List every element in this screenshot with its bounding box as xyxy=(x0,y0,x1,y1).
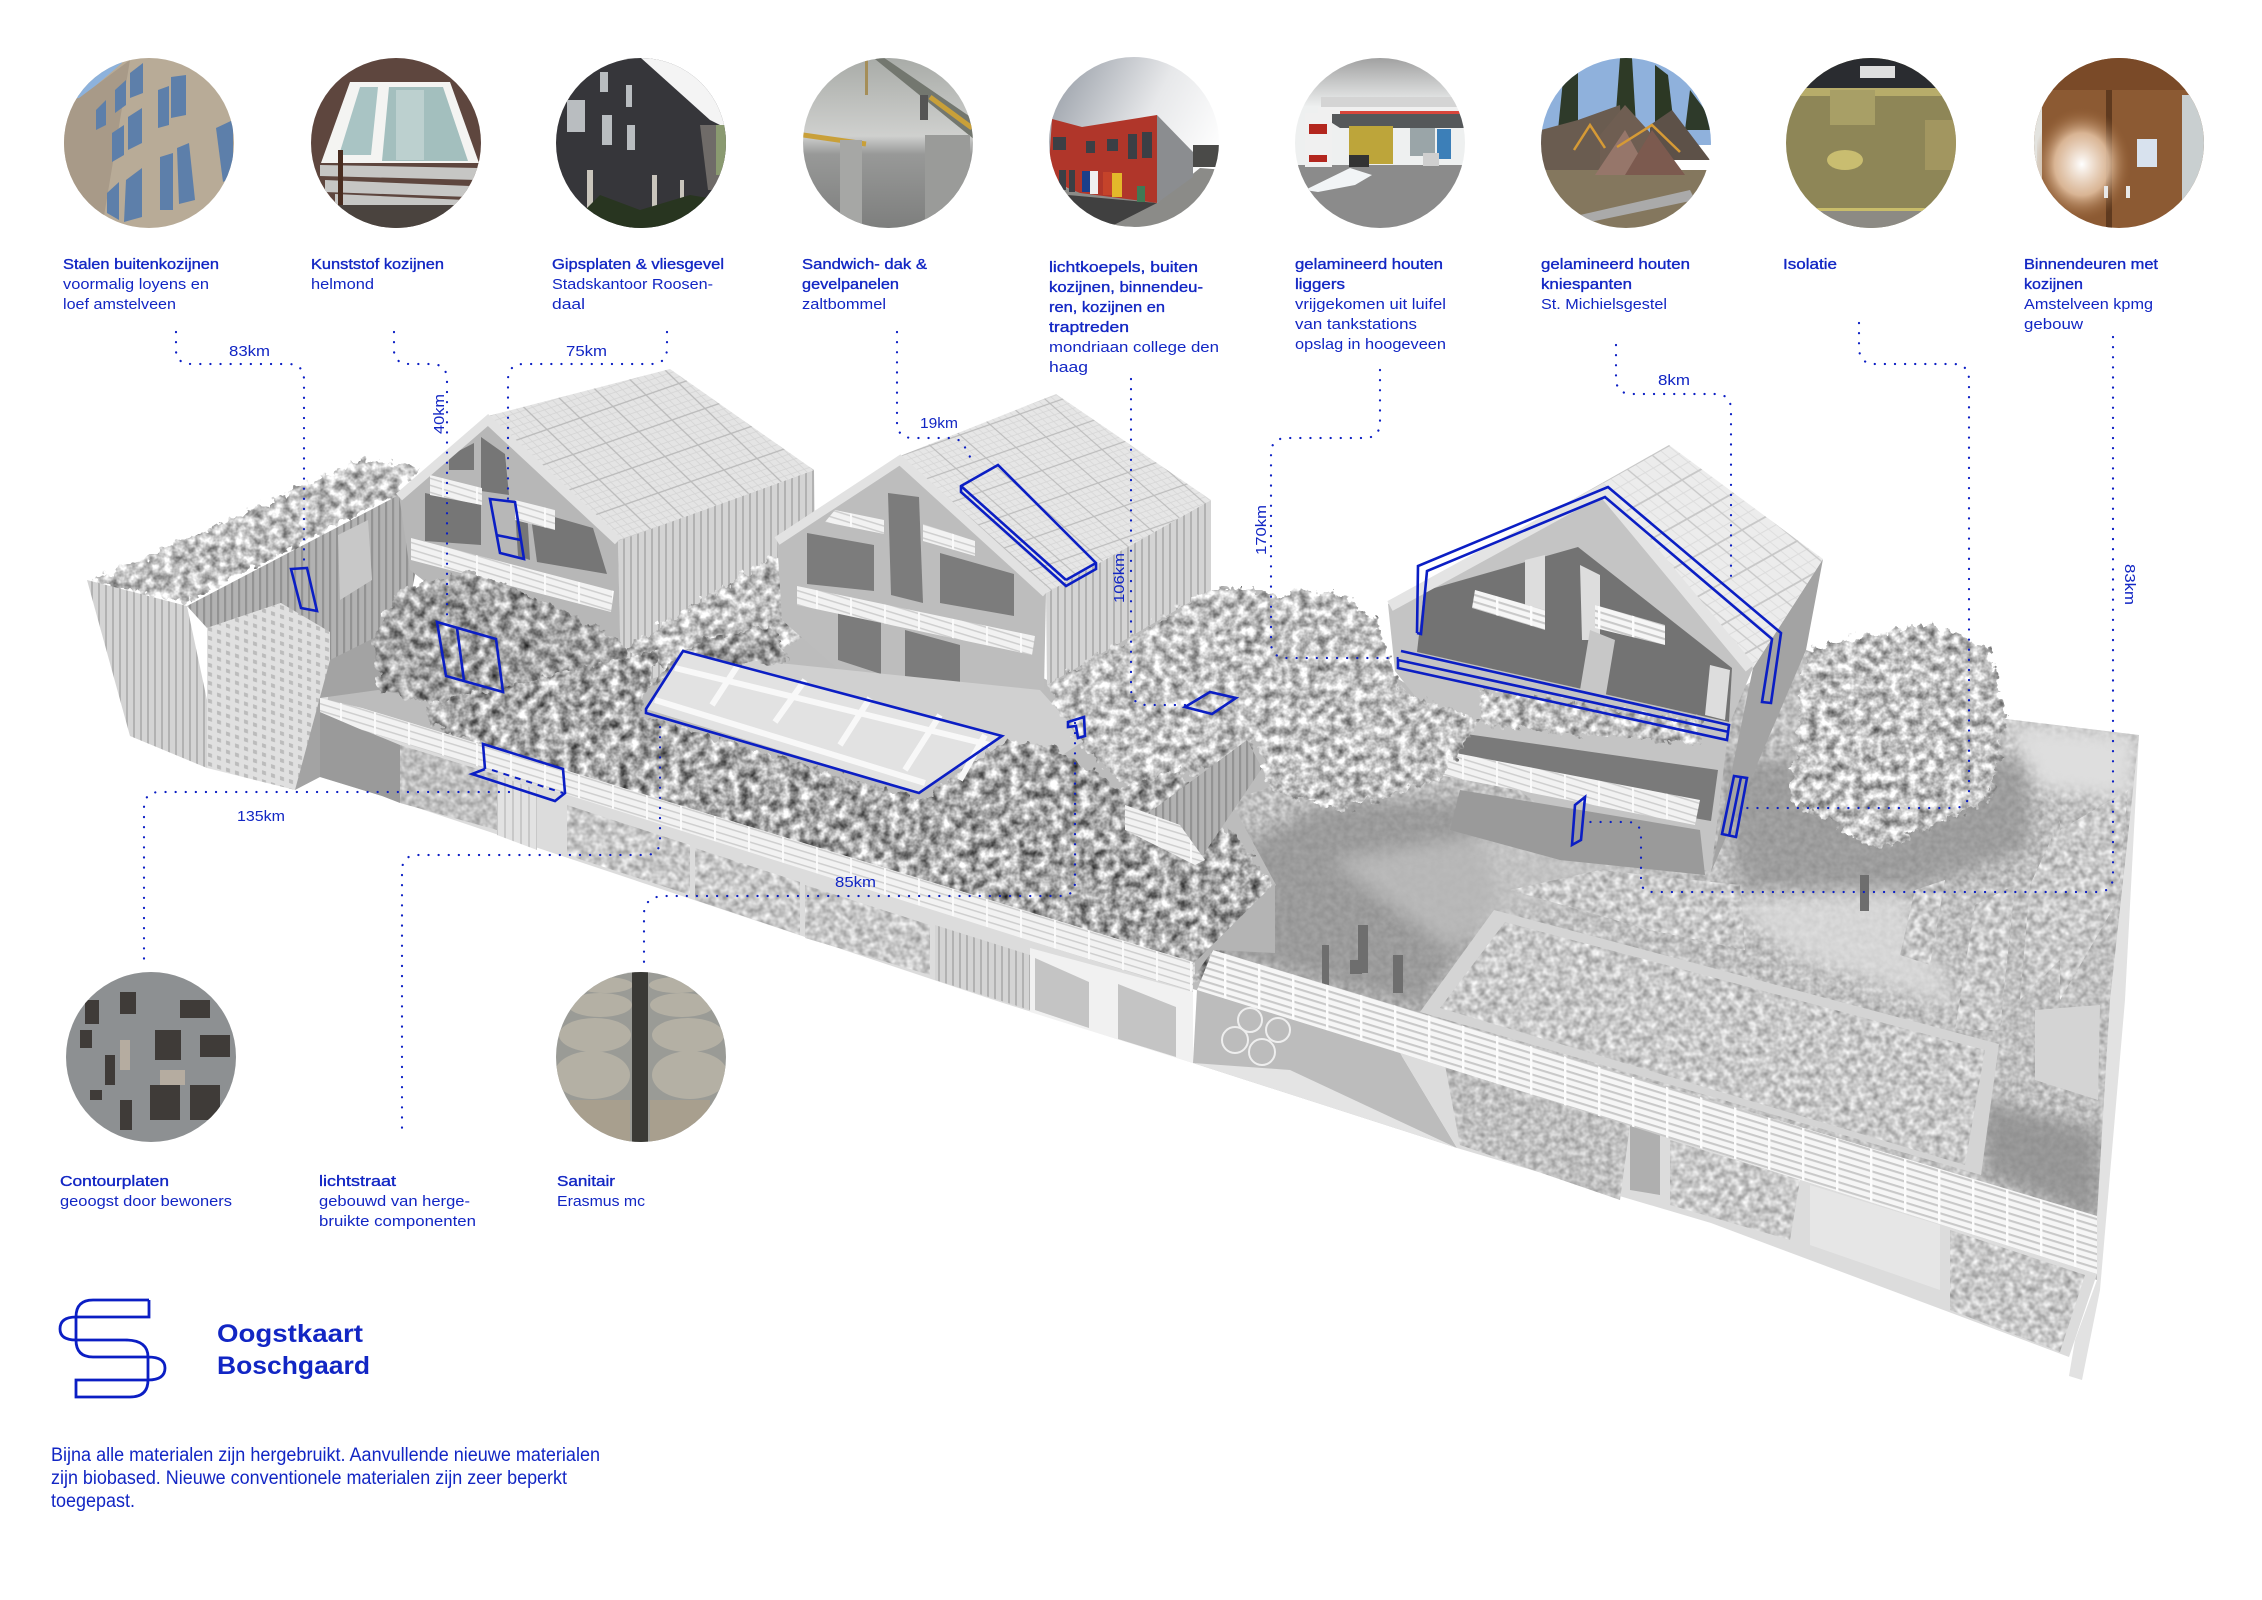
house 3 roof xyxy=(1602,445,1823,668)
highlight: steel frame xyxy=(291,568,317,611)
caption: Stalen buitenkozijnen: voormalig loyens en xyxy=(63,276,209,293)
title: Boschgaard xyxy=(217,1352,370,1380)
house 2 windows xyxy=(807,493,1014,690)
photo: insulation xyxy=(1786,58,1956,228)
door 1 xyxy=(1035,958,1089,1028)
house 1 gable xyxy=(399,416,621,680)
caption: lichtkoepels: kozijnen, binnendeu- xyxy=(1049,279,1203,296)
house 3 gable xyxy=(1388,483,1753,872)
connector: Kunststof kozijnen xyxy=(394,332,447,622)
caption: lichtkoepels xyxy=(1049,259,1219,376)
raised planter planting xyxy=(1440,922,1985,1165)
bicycle parking right xyxy=(2035,1005,2100,1100)
house 3 balconies xyxy=(1472,590,1665,645)
house 1 xyxy=(399,369,816,690)
caption: Binnendeuren: Binnendeuren met xyxy=(2024,256,2159,273)
title xyxy=(217,1320,370,1380)
distance 83km right: 83km xyxy=(2121,564,2138,605)
photo: plastic window frame xyxy=(311,58,481,228)
photo: steel window frames on brick facade xyxy=(64,58,234,228)
connector: Sanitair xyxy=(644,723,1075,968)
left block lower volume xyxy=(295,620,435,790)
highlight: glulam knee frame xyxy=(1417,487,1781,703)
front facade right xyxy=(1400,1053,2097,1357)
house 2 gable xyxy=(777,456,1046,690)
garden ground xyxy=(1196,650,2139,1216)
caption: gelamineerd houten kniespanten xyxy=(1541,256,1690,313)
house 3 barge board xyxy=(1390,490,1750,668)
caption: Sandwich panelen: Sandwich- dak & xyxy=(802,256,927,273)
caption: gelamineerd houten kniespanten: gelamineerd houten xyxy=(1541,256,1690,273)
caption: gelamineerd houten liggers xyxy=(1295,256,1446,353)
facade windows and trees left xyxy=(320,712,1030,1010)
caption: lichtkoepels: haag xyxy=(1049,359,1088,376)
connector: lichtkoepels xyxy=(1131,379,1185,705)
caption: gelamineerd houten liggers: liggers xyxy=(1295,276,1345,293)
central roof planting xyxy=(425,650,1275,985)
distance 40km: 40km xyxy=(431,394,448,434)
house 3 side wall xyxy=(1711,559,1823,872)
bicycle passage pavement xyxy=(1193,1063,1457,1148)
caption: Binnendeuren: gebouw xyxy=(2024,316,2083,333)
caption: Gipsplaten en vliesgevel: daal xyxy=(552,296,585,313)
planting between houses 1 and 2 xyxy=(621,530,816,690)
highlight: interior door xyxy=(1572,797,1585,845)
lichtstraat glass roof xyxy=(646,651,1002,793)
caption: gelamineerd houten kniespanten: St. Michielsgestel xyxy=(1541,296,1667,313)
highlight: glulam beams xyxy=(1398,651,1729,740)
distance 135km: 135km xyxy=(237,808,285,825)
distance 19km: 19km xyxy=(920,415,958,432)
distance 106km: 106km xyxy=(1111,553,1128,603)
caption: lichtkoepels: traptreden xyxy=(1049,319,1129,336)
caption: gelamineerd houten liggers: vrijgekomen uit luifel xyxy=(1295,296,1446,313)
axonometric view of Boschgaard xyxy=(87,369,2139,1380)
caption: Binnendeuren xyxy=(2024,256,2159,333)
distance 170km: 170km xyxy=(1253,505,1270,555)
bicycle passage xyxy=(1193,990,1457,1148)
caption: Sanitair xyxy=(557,1173,646,1210)
caption: Sanitair: Erasmus mc xyxy=(557,1193,646,1210)
pergola left xyxy=(320,698,1193,992)
highlight: insulation xyxy=(1722,776,1747,837)
distance 83km: 83km xyxy=(229,343,270,360)
highlight: solar panel xyxy=(961,465,1096,586)
left block xyxy=(87,459,435,790)
connector: Sandwich panels xyxy=(897,332,973,462)
house 2 xyxy=(777,394,1211,690)
caption: lichtstraat: bruikte componenten xyxy=(319,1213,476,1230)
connector: Stalen buitenkozijnen xyxy=(176,332,304,569)
caption: Stalen buitenkozijnen: loef amstelveen xyxy=(63,296,176,313)
white door wall xyxy=(1030,948,1193,1063)
photo: petrol station xyxy=(1295,58,1465,228)
house 3 lattice columns xyxy=(1525,555,1730,720)
caption: gelamineerd houten liggers: gelamineerd houten xyxy=(1295,256,1443,273)
shrubs in front of house 3 xyxy=(1510,870,1745,950)
caption: Gipsplaten en vliesgevel: Stadskantoor Roosen- xyxy=(552,276,713,293)
house 3 xyxy=(1388,445,1823,875)
highlight: plastic frame xyxy=(490,499,524,559)
house 3 lower balcony xyxy=(1440,750,1700,825)
caption: Contourplaten xyxy=(60,1173,232,1210)
highlight: window wall xyxy=(437,622,503,692)
distance 85km: 85km xyxy=(835,874,876,891)
caption: lichtstraat xyxy=(319,1173,476,1230)
title: Oogstkaart xyxy=(217,1320,364,1348)
tree left of house 3 xyxy=(1245,590,1480,810)
photo: church with laminated trusses xyxy=(1541,58,1711,228)
caption: Contourplaten: geoogst door bewoners xyxy=(60,1193,232,1210)
base mass behind the planting xyxy=(320,560,2139,1280)
distance labels xyxy=(229,343,2138,891)
connector: Contourplaten xyxy=(144,792,509,966)
description text xyxy=(51,1445,600,1512)
house 2 roof xyxy=(900,394,1211,593)
caption: Sanitair: Sanitair xyxy=(557,1173,615,1190)
highlight: skylight xyxy=(1185,692,1236,714)
house 1 barge board xyxy=(399,420,618,541)
door 2 xyxy=(1118,984,1176,1057)
connector: gelamineerd houten liggers xyxy=(1271,370,1399,658)
caption: Stalen buitenkozijnen xyxy=(63,256,219,313)
caption: Sandwich panelen: gevelpanelen xyxy=(802,276,899,293)
caption: Sandwich panelen: zaltbommel xyxy=(802,296,886,313)
house 2 upper balconies xyxy=(825,510,975,556)
connector: lichtstraat xyxy=(402,717,660,1135)
caption: gelamineerd houten kniespanten: kniespanten xyxy=(1541,276,1632,293)
right end wall xyxy=(2069,735,2139,1380)
caption: lichtstraat: gebouwd van herge- xyxy=(319,1193,470,1210)
caption: Kunststof kozijnen: helmond xyxy=(311,276,374,293)
description text: toegepast. xyxy=(51,1491,135,1512)
house 3 lower glazing xyxy=(1452,732,1718,821)
logo xyxy=(60,1300,165,1397)
raised planter xyxy=(1420,910,1999,1175)
house 1 upper balconies xyxy=(430,475,555,530)
caption: Contourplaten: Contourplaten xyxy=(60,1173,169,1190)
caption: lichtkoepels: ren, kozijnen en xyxy=(1049,299,1165,316)
caption: lichtstraat: lichtstraat xyxy=(319,1173,397,1190)
terrace xyxy=(683,651,1085,790)
bicycles xyxy=(1222,1008,1290,1065)
planting right of house 2 xyxy=(1047,590,1300,790)
left block windows xyxy=(338,520,372,600)
blue highlighted building components xyxy=(291,465,1781,845)
caption: Kunststof kozijnen: Kunststof kozijnen xyxy=(311,256,444,273)
description text: Bijna alle materialen zijn hergebruikt. Aanvullende nieuwe materialen xyxy=(51,1445,600,1466)
garden light and shade xyxy=(1210,722,2139,1220)
photo: sanitary units xyxy=(550,970,730,1145)
people in garden xyxy=(1322,875,1869,993)
distance 75km: 75km xyxy=(566,343,607,360)
highlight: lichtstraat xyxy=(646,651,1002,793)
left block side wall xyxy=(187,495,418,660)
house 1 balcony xyxy=(411,538,614,612)
dotted connector lines xyxy=(144,323,2113,1135)
left block green roof xyxy=(92,459,422,602)
photo: interior doors xyxy=(2034,58,2204,228)
caption: Gipsplaten en vliesgevel xyxy=(552,256,724,313)
small wing xyxy=(1131,740,1262,855)
planting behind terrace xyxy=(640,625,790,690)
climbing plants on house 3 xyxy=(1480,690,1700,745)
facade windows right xyxy=(1445,1065,2085,1352)
planting in front of house 1 xyxy=(372,570,640,720)
caption: Binnendeuren: Amstelveen kpmg xyxy=(2024,296,2153,313)
front facade left xyxy=(320,712,1193,1063)
house 1 side wall xyxy=(618,470,816,690)
connector: Isolatie xyxy=(1746,323,1969,808)
caption: gelamineerd houten liggers: van tankstations xyxy=(1295,316,1417,333)
house 2 balcony xyxy=(797,586,1035,655)
tree right of house 3 xyxy=(1790,623,2006,850)
left block end wall xyxy=(87,580,207,768)
house 3 ground floor xyxy=(1450,790,1705,875)
pergola right xyxy=(1197,950,2097,1274)
caption: Sandwich panelen xyxy=(802,256,927,313)
photo: Mondriaan college xyxy=(1045,55,1225,232)
highlight: contour plate xyxy=(472,744,565,801)
caption: lichtkoepels: mondriaan college den xyxy=(1049,339,1219,356)
description text: zijn biobased. Nieuwe conventionele materialen zijn zeer beperkt xyxy=(51,1468,568,1489)
photo: sandwich panels xyxy=(800,55,975,235)
connector: Binnendeuren xyxy=(1585,337,2113,892)
caption: Gipsplaten en vliesgevel: Gipsplaten & vliesgevel xyxy=(552,256,724,273)
caption: Stalen buitenkozijnen: Stalen buitenkozijnen xyxy=(63,256,219,273)
caption: Binnendeuren: kozijnen xyxy=(2024,276,2083,293)
connector: Gipsplaten xyxy=(508,332,667,500)
highlight: sanitair xyxy=(1068,717,1085,738)
caption: Kunststof kozijnen xyxy=(311,256,444,293)
photo: plasterboard and curtain wall office xyxy=(555,55,730,235)
photo: contour plates xyxy=(60,970,240,1145)
house 1 windows xyxy=(425,437,607,574)
house 3 upper glazing xyxy=(1417,547,1732,722)
caption: gelamineerd houten liggers: opslag in hoogeveen xyxy=(1295,336,1446,353)
distance 8km: 8km xyxy=(1658,372,1690,389)
vegetable rows xyxy=(1900,790,2128,1030)
caption: Isolatie: Isolatie xyxy=(1783,256,1837,273)
stair railing xyxy=(1125,805,1205,865)
house 2 barge board xyxy=(777,460,1046,593)
planter wall xyxy=(1195,883,1275,975)
caption: lichtkoepels: lichtkoepels, buiten xyxy=(1049,259,1198,276)
lattice volume xyxy=(207,603,330,790)
house 2 side wall xyxy=(1046,500,1211,685)
house 1 roof xyxy=(488,369,814,541)
connector: gelamineerd houten kniespanten xyxy=(1616,345,1731,585)
